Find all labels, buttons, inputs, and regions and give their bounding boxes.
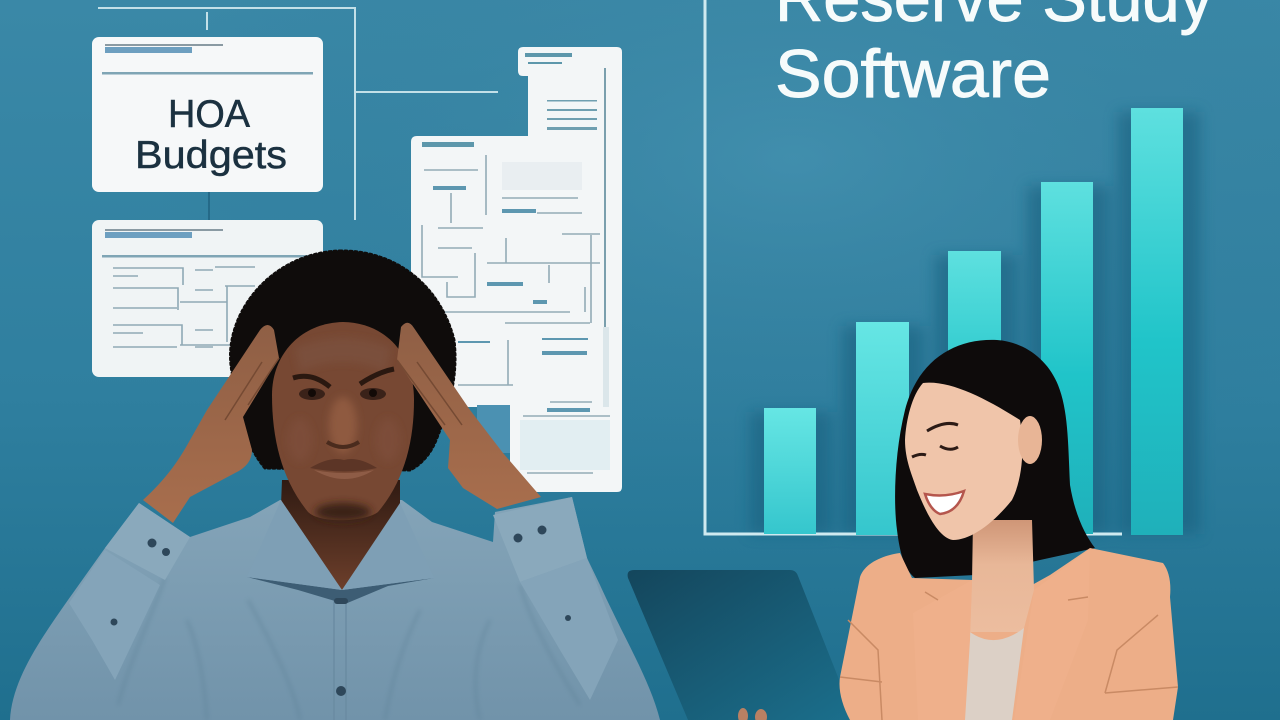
woman eyes and brows bbox=[912, 423, 958, 457]
woman top bbox=[964, 628, 1024, 720]
heading: Reserve Study Software: Software bbox=[775, 36, 1051, 112]
man shirt buttons bbox=[110, 526, 571, 696]
man hair bbox=[230, 251, 455, 470]
heading: HOA Budgets: HOA bbox=[168, 93, 250, 136]
man collar shadow bbox=[247, 577, 434, 604]
face shading bbox=[288, 338, 400, 521]
woman blazer bbox=[839, 548, 1178, 720]
chart bar shadows bbox=[750, 112, 1200, 534]
woman lapels bbox=[913, 549, 1090, 720]
woman smile bbox=[925, 491, 964, 514]
man shirt bbox=[10, 497, 660, 720]
woman neck and chest bbox=[970, 520, 1034, 632]
panel: budget document bbox=[92, 220, 323, 377]
man face bbox=[272, 322, 414, 520]
man left hand bbox=[143, 325, 279, 523]
woman jacket seams bbox=[840, 592, 1178, 720]
chart axes bbox=[705, 0, 1122, 534]
heading: HOA Budgets: Budgets bbox=[135, 134, 287, 177]
woman ear bbox=[1018, 416, 1042, 464]
flow connector lines bbox=[98, 8, 498, 220]
man brows and eyes bbox=[293, 369, 394, 447]
bar chart bbox=[764, 108, 1183, 535]
person: stressed man bbox=[10, 251, 660, 720]
heading: Reserve Study Software bbox=[775, 0, 1213, 112]
man neck bbox=[281, 480, 400, 590]
panel: flowchart document bbox=[411, 47, 622, 492]
woman face bbox=[905, 383, 1022, 540]
woman hair bbox=[895, 340, 1095, 578]
tablet bbox=[628, 570, 855, 720]
man mouth bbox=[310, 459, 377, 479]
panel: HOA Budgets card bbox=[92, 37, 323, 192]
shirt details bbox=[118, 578, 580, 720]
woman hand bbox=[738, 708, 767, 720]
man right hand bbox=[397, 323, 541, 509]
person: smiling woman bbox=[839, 340, 1178, 720]
man collar bbox=[247, 500, 434, 590]
